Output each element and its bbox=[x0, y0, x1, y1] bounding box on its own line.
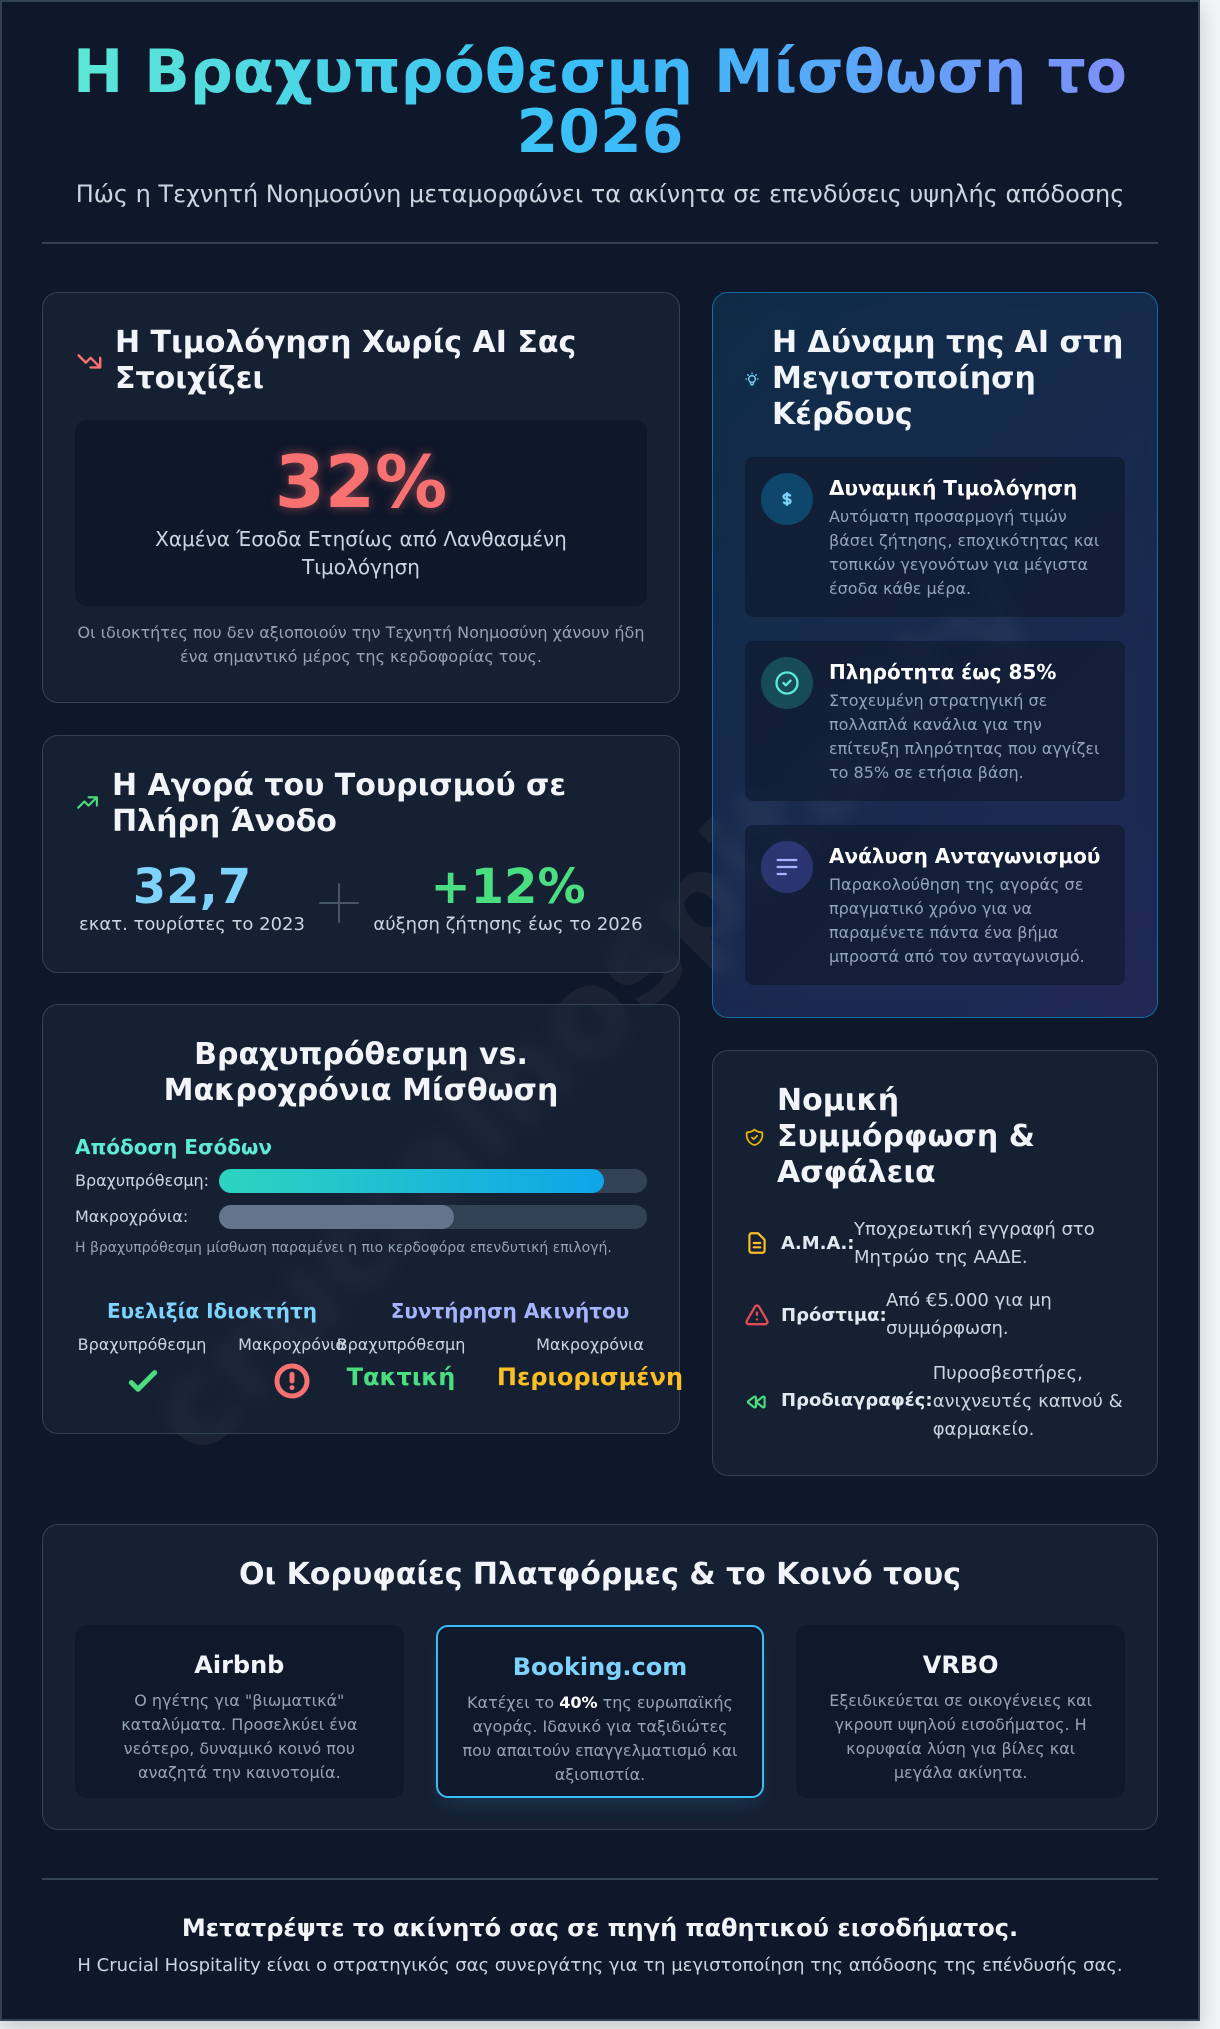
stat: demand growth bbox=[373, 859, 643, 935]
description: κορυφαία λύση για βίλες και bbox=[846, 1739, 1075, 1758]
card text: Παρακολούθηση της αγοράς σε bbox=[829, 875, 1083, 894]
heading bbox=[777, 1083, 1035, 1190]
heading: Οι Κορυφαίες Πλατφόρμες & το Κοινό τους bbox=[239, 1557, 961, 1592]
value: Υποχρεωτική εγγραφή στο bbox=[854, 1219, 1095, 1240]
heading: Βραχυπρόθεσμη vs. bbox=[194, 1037, 528, 1072]
note: Οι ιδιοκτήτες που δεν αξιοποιούν την Τεχνητή Νοημοσύνη χάνουν ήδη bbox=[78, 622, 644, 642]
heading bbox=[112, 768, 566, 839]
icon: plus bbox=[319, 883, 359, 923]
panel: legal compliance bbox=[712, 1050, 1158, 1476]
icon: check circle bbox=[761, 657, 813, 709]
card text: μπροστά από τον ανταγωνισμό. bbox=[829, 947, 1085, 966]
description: Εξειδικεύεται σε οικογένειες και bbox=[829, 1691, 1092, 1710]
icon: alert bbox=[274, 1364, 310, 1398]
note: ένα σημαντικό μέρος της κερδοφορίας τους. bbox=[180, 647, 542, 666]
card text bbox=[829, 691, 1099, 782]
title: Η Βραχυπρόθεσμη Μίσθωση το bbox=[73, 37, 1127, 107]
stat: tourists: εκατ. τουρίστες το 2023 bbox=[79, 914, 305, 935]
stat label: Χαμένα Έσοδα Ετησίως από Λανθασμένη bbox=[155, 527, 567, 551]
card title: Πληρότητα έως 85% bbox=[829, 660, 1056, 684]
icon: rewind bbox=[746, 1396, 766, 1408]
card: competition analysis bbox=[745, 825, 1125, 985]
description: καταλύματα. Προσελκύει ένα bbox=[121, 1715, 357, 1734]
value: Μητρώο της ΑΑΔΕ. bbox=[854, 1247, 1028, 1268]
value: tactical: Τακτική bbox=[347, 1363, 455, 1391]
icon: trending down bbox=[77, 354, 102, 369]
value: Από €5.000 για μη bbox=[886, 1290, 1052, 1311]
stat box: 32% bbox=[75, 420, 647, 606]
icon: shield bbox=[746, 1128, 764, 1146]
description: που απαιτούν επαγγελματισμό και bbox=[463, 1741, 737, 1760]
stat: demand growth: αύξηση ζήτησης έως το 2026 bbox=[373, 914, 643, 935]
description: αναζητά την καινοτομία. bbox=[138, 1763, 341, 1782]
card: VRBO bbox=[796, 1625, 1125, 1798]
item: registry bbox=[748, 1219, 1095, 1268]
card title: Ανάλυση Ανταγωνισμού bbox=[829, 844, 1100, 868]
card text: Στοχευμένη στρατηγική σε bbox=[829, 691, 1047, 710]
stat label bbox=[155, 527, 567, 579]
heading bbox=[772, 325, 1123, 432]
label: Πρόστιμα: bbox=[781, 1305, 887, 1326]
card: Airbnb bbox=[75, 1625, 404, 1798]
heading: Η Αγορά του Τουρισμού σε bbox=[112, 768, 566, 803]
stat label: Τιμολόγηση bbox=[302, 555, 420, 579]
value bbox=[933, 1363, 1123, 1440]
subtitle: Πώς η Τεχνητή Νοημοσύνη μεταμορφώνει τα ακίνητα σε επενδύσεις υψηλής απόδοσης bbox=[76, 180, 1124, 208]
heading: Η Τιμολόγηση Χωρίς AI Σας bbox=[115, 325, 576, 360]
heading: Νομική bbox=[777, 1083, 899, 1118]
icon: dollar bbox=[761, 473, 813, 525]
description: γκρουπ υψηλού εισοδήματος. Η bbox=[835, 1715, 1087, 1734]
panel: pricing without AI bbox=[42, 292, 680, 703]
card text: Αυτόματη προσαρμογή τιμών bbox=[829, 507, 1067, 526]
description: αγοράς. Ιδανικό για ταξιδιώτες bbox=[472, 1717, 728, 1736]
icon: light bulb bbox=[745, 372, 759, 386]
name: Airbnb bbox=[194, 1651, 284, 1679]
panel: power of AI bbox=[712, 292, 1158, 1018]
value: Πυροσβεστήρες, bbox=[933, 1363, 1083, 1384]
description: Ο ηγέτης για "βιωματικά" bbox=[134, 1691, 344, 1710]
icon: check bbox=[128, 1370, 158, 1392]
label: Α.Μ.Α.: bbox=[781, 1233, 854, 1254]
value: ανιχνευτές καπνού & bbox=[933, 1391, 1123, 1412]
title bbox=[42, 42, 1158, 162]
label: long term flexibility: Μακροχρόνια bbox=[238, 1334, 346, 1354]
card text: πραγματικό χρόνο για να bbox=[829, 899, 1032, 918]
card text: πολλαπλά κανάλια για την bbox=[829, 715, 1042, 734]
heading: Η Δύναμη της AI στη bbox=[772, 325, 1123, 360]
description: αξιοπιστία. bbox=[555, 1765, 645, 1784]
heading: Στοιχίζει bbox=[115, 361, 264, 396]
heading: Μακροχρόνια Μίσθωση bbox=[164, 1073, 558, 1108]
icon: document bbox=[748, 1232, 766, 1254]
heading: Συμμόρφωση & bbox=[777, 1119, 1035, 1154]
card text: επίτευξη πληρότητας που αγγίζει bbox=[829, 739, 1099, 758]
stat: demand growth: +12% bbox=[430, 859, 586, 915]
icon: trending up bbox=[77, 796, 98, 809]
icon: lines bbox=[761, 841, 813, 893]
value: limited: Περιορισμένη bbox=[497, 1363, 683, 1391]
note bbox=[78, 622, 644, 666]
footer text: Η Crucial Hospitality είναι ο στρατηγικός σας συνεργάτης για τη μεγιστοποίηση της απόδοσης της επένδυσής σας. bbox=[77, 1955, 1123, 1976]
card text bbox=[829, 875, 1085, 966]
name: Booking.com bbox=[513, 1653, 687, 1681]
card: occupancy bbox=[745, 641, 1125, 801]
heading: Κέρδους bbox=[772, 397, 913, 432]
card text: βάσει ζήτησης, εποχικότητας και bbox=[829, 531, 1099, 550]
label: long term maintenance: Μακροχρόνια bbox=[536, 1334, 644, 1354]
card text: παραμένετε πάντα ένα βήμα bbox=[829, 923, 1058, 942]
card title: Δυναμική Τιμολόγηση bbox=[829, 476, 1077, 500]
card text: το 85% σε ετήσια βάση. bbox=[829, 763, 1024, 782]
stat: tourists bbox=[79, 859, 305, 935]
bar chart: long term: Μακροχρόνια: bbox=[75, 1206, 188, 1226]
label: short term maintenance: Βραχυπρόθεσμη bbox=[337, 1334, 465, 1354]
description bbox=[829, 1691, 1092, 1782]
description bbox=[121, 1691, 357, 1782]
big number: 32% bbox=[275, 440, 447, 524]
value bbox=[854, 1219, 1095, 1268]
panel: short vs long term rental bbox=[42, 1004, 680, 1434]
value: φαρμακείο. bbox=[933, 1419, 1034, 1440]
description: μεγάλα ακίνητα. bbox=[894, 1763, 1028, 1782]
panel: platforms bbox=[42, 1524, 1158, 1830]
revenue heading: Απόδοση Εσόδων bbox=[75, 1135, 272, 1159]
heading: Πλήρη Άνοδο bbox=[112, 804, 337, 839]
card text: τοπικών γεγονότων για μέγιστα bbox=[829, 555, 1088, 574]
heading: Μεγιστοποίηση bbox=[772, 361, 1036, 396]
label: short term flexibility: Βραχυπρόθεσμη bbox=[78, 1334, 206, 1354]
label: Προδιαγραφές: bbox=[781, 1390, 933, 1411]
footer headline: Μετατρέψτε το ακίνητό σας σε πηγή παθητικού εισοδήματος. bbox=[182, 1914, 1018, 1942]
bar chart: short term: Βραχυπρόθεσμη: bbox=[75, 1170, 209, 1190]
panel: tourism market bbox=[42, 735, 680, 973]
stat: tourists: 32,7 bbox=[133, 859, 251, 915]
item: fine bbox=[745, 1290, 1052, 1339]
card text bbox=[829, 507, 1099, 598]
heading bbox=[115, 325, 576, 396]
card: Booking.com bbox=[436, 1625, 764, 1798]
title: 2026 bbox=[516, 97, 684, 167]
description: νεότερο, δυναμικό κοινό που bbox=[124, 1739, 355, 1758]
card: dynamic pricing bbox=[745, 457, 1125, 617]
value bbox=[886, 1290, 1052, 1339]
item: specifications bbox=[746, 1363, 1123, 1440]
name: VRBO bbox=[923, 1651, 999, 1679]
bar chart: short term bbox=[75, 1169, 647, 1193]
maintenance heading: Συντήρηση Ακινήτου bbox=[391, 1299, 629, 1323]
chart note: Η βραχυπρόθεσμη μίσθωση παραμένει η πιο κερδοφόρα επενδυτική επιλογή. bbox=[75, 1240, 612, 1256]
watermark: crucialhospitality bbox=[118, 538, 1062, 1482]
description bbox=[463, 1693, 737, 1784]
flexibility heading: Ευελιξία Ιδιοκτήτη bbox=[107, 1299, 317, 1323]
bar chart: long term bbox=[75, 1205, 647, 1229]
value: συμμόρφωση. bbox=[886, 1318, 1009, 1339]
heading: Ασφάλεια bbox=[777, 1155, 936, 1190]
description: Κατέχει το 40% της ευρωπαϊκής bbox=[467, 1693, 733, 1712]
card text: έσοδα κάθε μέρα. bbox=[829, 579, 971, 598]
heading bbox=[164, 1037, 558, 1108]
icon: warning bbox=[745, 1304, 769, 1326]
